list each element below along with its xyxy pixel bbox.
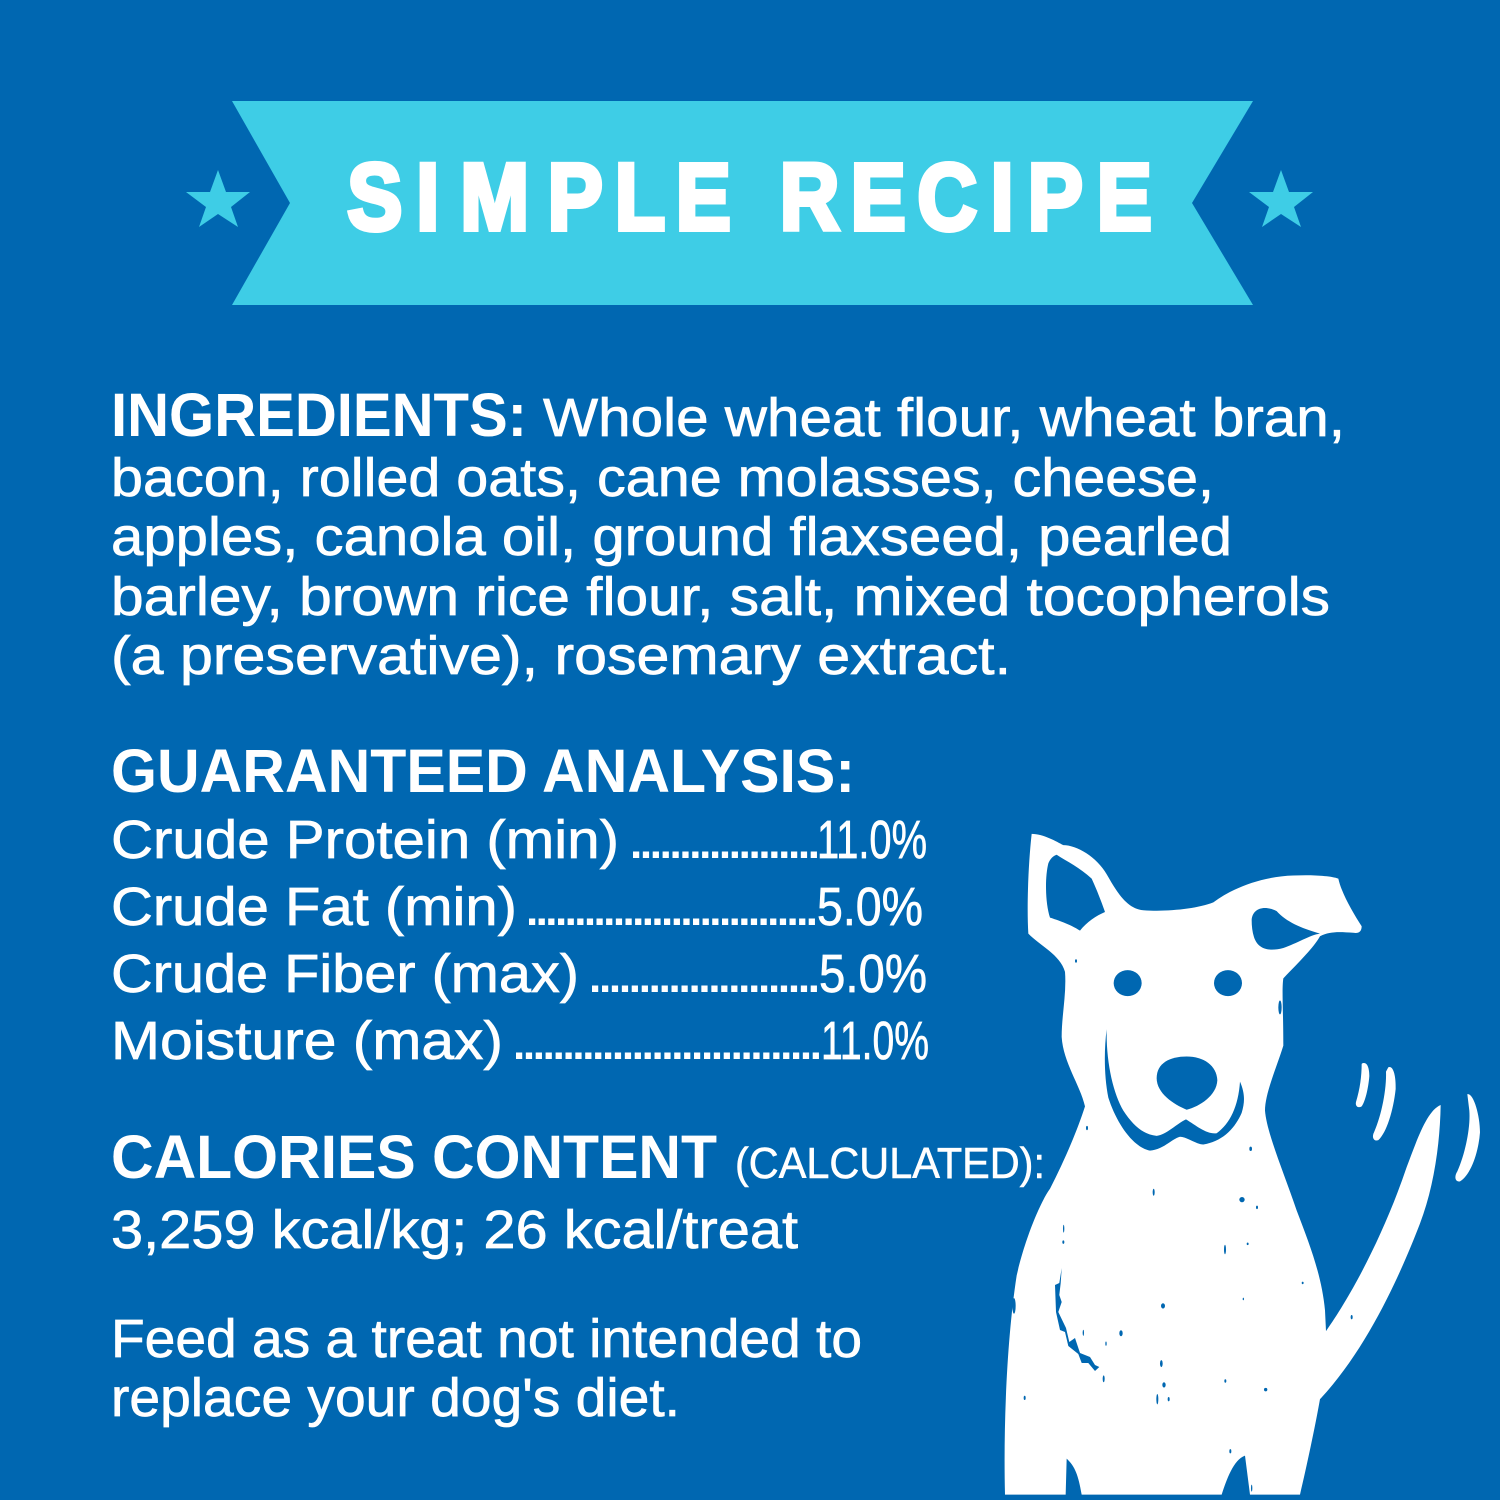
banner title text: SIMPLE RECIPE	[347, 143, 1152, 250]
ingredients text block: (a preservative), rosemary extract.	[111, 626, 1011, 686]
dog mouth	[1105, 1029, 1244, 1151]
guaranteed analysis block: GUARANTEED ANALYSIS:	[111, 737, 855, 805]
guaranteed analysis block: 11.0%	[817, 810, 927, 870]
guaranteed analysis block: Moisture (max)	[111, 1011, 503, 1071]
feeding note	[111, 1309, 862, 1428]
dog speckles	[1012, 959, 1353, 1492]
calories content block	[111, 1123, 1045, 1260]
calories content block: 3,259 kcal/kg; 26 kcal/treat	[111, 1200, 798, 1260]
guaranteed analysis block: Crude Fiber (max)	[111, 944, 579, 1004]
guaranteed analysis block: Crude Protein (min)	[111, 810, 619, 870]
feeding note: replace your dog's diet.	[111, 1368, 680, 1428]
ingredients text block: INGREDIENTS:	[111, 381, 527, 449]
ingredients text block	[111, 381, 1345, 686]
calories content block: (CALCULATED):	[735, 1139, 1045, 1188]
guaranteed analysis block: Crude Fat (min)	[111, 877, 517, 937]
guaranteed analysis block: .......................	[589, 953, 820, 1002]
dog left eye	[1114, 970, 1142, 996]
ingredients text block: bacon, rolled oats, cane molasses, cheese,	[111, 448, 1214, 508]
calories content block: CALORIES CONTENT	[111, 1123, 717, 1191]
dog right ear opening	[1252, 908, 1320, 950]
guaranteed analysis block: 11.0%	[821, 1011, 929, 1071]
guaranteed analysis block	[111, 737, 929, 1071]
icon: left star	[186, 170, 250, 227]
illustration: white dog wagging tail	[1005, 834, 1441, 1495]
guaranteed analysis block: ...............................	[513, 1020, 822, 1069]
dog left ear opening	[1046, 855, 1105, 931]
title banner	[232, 101, 1253, 305]
ingredients text block: apples, canola oil, ground flaxseed, pearled	[111, 507, 1232, 567]
ingredients text block: Whole wheat flour, wheat bran,	[543, 388, 1345, 448]
guaranteed analysis block: ..............................	[526, 886, 818, 935]
dog nose	[1157, 1056, 1217, 1110]
feeding note: Feed as a treat not intended to	[111, 1309, 862, 1369]
dog chest scratch texture	[1055, 1268, 1099, 1371]
icon: tail wag motion lines	[1356, 1063, 1480, 1181]
guaranteed analysis block: ...................	[630, 819, 820, 868]
icon: right star	[1249, 170, 1313, 227]
guaranteed analysis block: 5.0%	[819, 944, 927, 1004]
dog right eye	[1214, 970, 1242, 996]
guaranteed analysis block: 5.0%	[817, 877, 923, 937]
ingredients text block: barley, brown rice flour, salt, mixed tocopherols	[111, 567, 1330, 627]
